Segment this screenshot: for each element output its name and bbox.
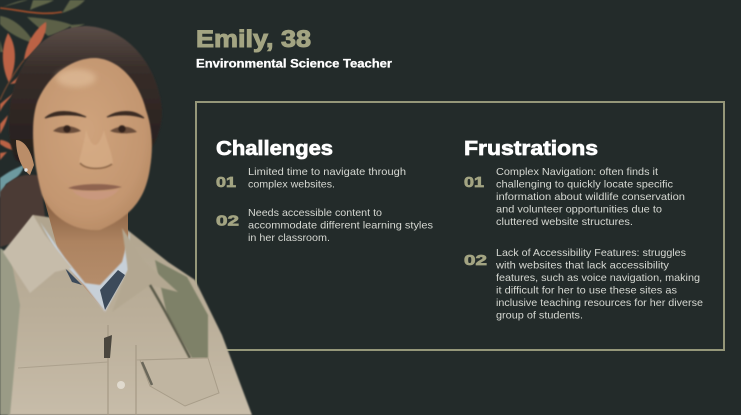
frustration 01: Complex Navigation: often finds it [496,166,658,178]
challenge 01: Limited time to navigate through [248,166,406,178]
backpack straps [0,248,208,415]
challenges column [216,138,433,244]
challenge 02: 02 [216,214,239,230]
frustrations heading: Frustrations [464,138,598,160]
frustration 01: cluttered website structures. [496,216,633,228]
shirt [8,215,252,415]
challenge 01: 01 [216,175,236,191]
frustration 02: features, such as voice navigation, making [496,272,700,284]
frustration 02 [464,247,703,322]
frustration 01: 01 [464,175,484,191]
shirt folds, placket and pocket [18,285,219,415]
forehead highlight [56,69,96,87]
challenge 02 [216,207,433,244]
challenge 01 [216,166,406,191]
challenge 02: accommodate different learning styles [248,220,433,232]
portrait: woman in field shirt [0,26,252,415]
frustration 02: Lack of Accessibility Features: struggles [496,247,686,259]
frustration 01: challenging to quickly locate specific [496,178,673,190]
face [33,58,152,230]
frustration 02: it difficult for her to use these sites as [496,284,677,296]
hair [9,26,162,170]
frustration 02: group of students. [496,310,583,322]
challenge 02: in her classroom. [248,232,330,244]
name heading: Emily, 38 [196,26,311,53]
frustration 01: information about wildlife conservation [496,191,685,203]
job title: Environmental Science Teacher [196,56,392,70]
challenge 01: complex websites. [248,178,335,190]
frustration 02: 02 [464,253,487,269]
plaid undershirt [40,222,130,312]
ear [16,140,34,175]
facial features [45,112,144,200]
collars [3,215,178,312]
frustration 01 [464,166,685,228]
earring [24,168,28,172]
frustration 02: with websites that lack accessibility [495,260,670,272]
ponytail [0,175,46,247]
frustration 01: and volunteer opportunities due to [496,204,662,216]
neck [43,195,128,312]
challenge 02: Needs accessible content to [248,207,382,219]
frustration 02: inclusive teaching resources for her diverse [496,297,703,309]
challenges heading: Challenges [216,138,333,160]
content panel [196,102,724,350]
frustrations column [464,138,703,322]
foliage decoration [0,0,85,198]
